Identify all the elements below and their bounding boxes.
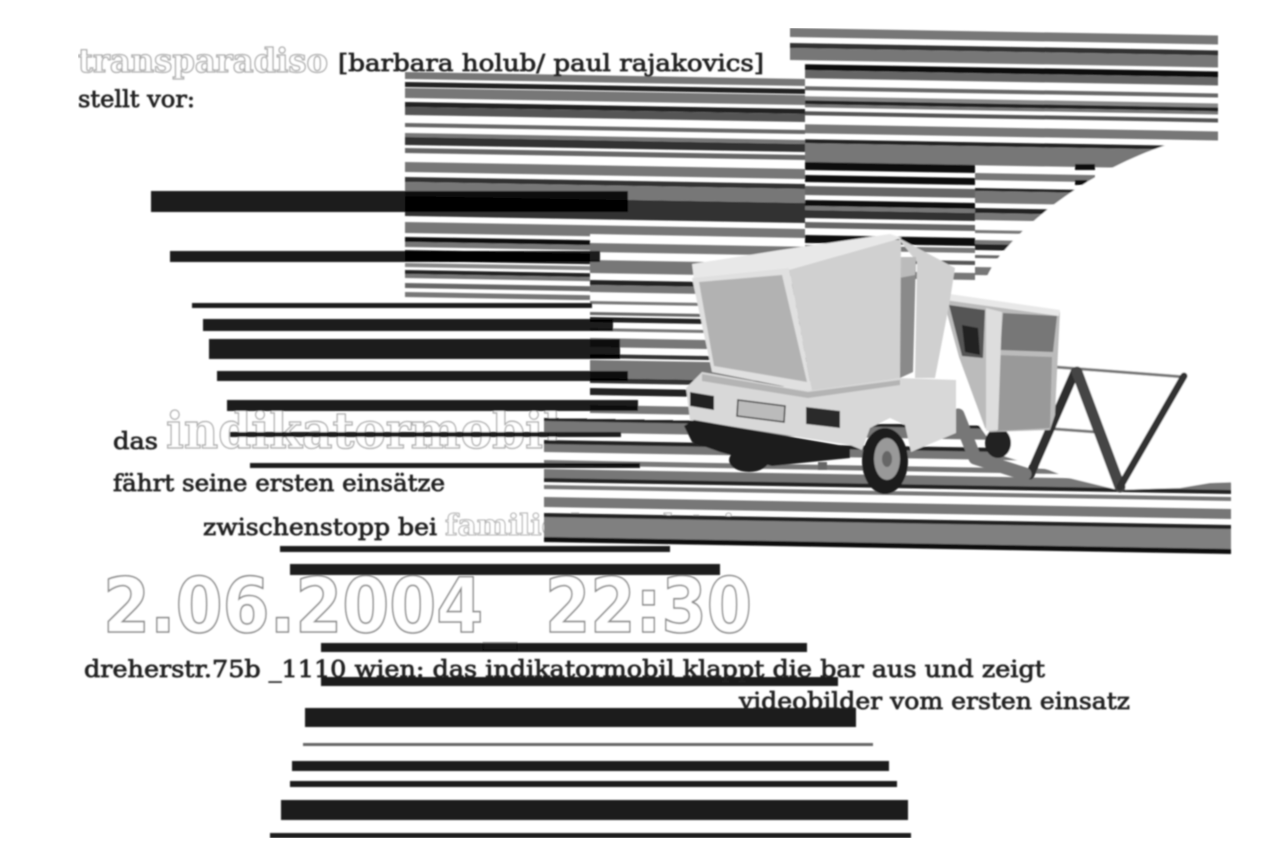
exhaust [818, 462, 827, 470]
address and description line 1: dreherstr.75b _1110 wien: das indikatormobil klappt die bar aus und zeigt [84, 657, 1046, 683]
far front wheel [985, 428, 1011, 458]
canopy side flap [897, 237, 955, 378]
number plate [737, 400, 785, 422]
bumper [684, 420, 850, 466]
presenter text: names: [barbara holub/ paul rajakovics] [338, 51, 764, 77]
canopy body [789, 240, 901, 392]
canopy roof edge [692, 234, 902, 280]
text: first missions: fährt seine ersten einsätze [113, 471, 445, 497]
outlined date: 2.06.2004_ [103, 561, 517, 650]
outlined word: indikatormobil: indikatormobil [166, 401, 561, 460]
front wheel [862, 428, 908, 494]
outlined name: transparadiso: transparadiso [78, 41, 328, 80]
black horizontal bars [151, 191, 911, 838]
stripe block: upper left [405, 72, 805, 304]
tail light left [690, 392, 714, 410]
description line 2: videobilder vom ersten einsatz [738, 689, 1130, 715]
text: das: das [113, 429, 158, 455]
white curved cut-out [975, 143, 1240, 490]
truck bed and body [686, 372, 956, 452]
outlined words: family name: familie hasselsteiner [445, 508, 791, 542]
cab [942, 295, 1060, 432]
presenter text: stellt vor: stellt vor: [78, 87, 195, 113]
stripe column: under top right [805, 162, 975, 280]
outlined time: 22:30 [545, 561, 752, 650]
folding bar frame [958, 367, 1185, 487]
canopy rear panel [692, 268, 812, 392]
stripe block: centre [590, 243, 810, 417]
rear wheel [729, 448, 769, 472]
stripe block: top right [790, 28, 1218, 169]
tail light right [806, 407, 840, 428]
stripe column: beside the curve [975, 164, 1105, 277]
stripe block: bottom band [544, 418, 1244, 554]
text: stopover: zwischenstopp bei [203, 515, 437, 541]
photo: indikatormobil van with folded bar [684, 234, 1185, 494]
